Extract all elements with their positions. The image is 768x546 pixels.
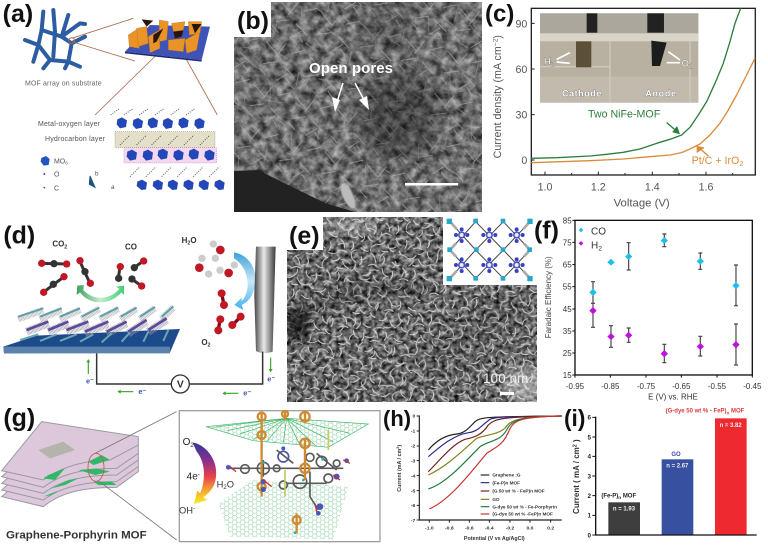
panel c: polarization chart xyxy=(485,1,755,210)
zoom circle on framework xyxy=(69,38,75,44)
label O2: O xyxy=(201,338,208,347)
y labels: -5 xyxy=(411,488,416,494)
bar labels: (G-dye 50 wt % - FeP) xyxy=(666,409,727,415)
caption: metal-oxygen layer: Metal-oxygen layer xyxy=(38,121,101,128)
legend: (G-dye 50 wt % -FeP)n MOF xyxy=(492,512,553,517)
panel label i: (i) xyxy=(564,405,585,431)
bar labels: MOF xyxy=(729,409,745,415)
connector lines from MOF to array xyxy=(72,18,217,115)
label OH-: OH xyxy=(179,505,193,515)
curve: Two NiFe-MOF xyxy=(531,8,741,158)
y axis labels: 45 xyxy=(563,305,572,314)
x labels: 0.2 xyxy=(547,525,554,531)
series H2 xyxy=(589,307,740,357)
circuit wiring xyxy=(97,352,263,384)
voltmeter: V xyxy=(177,380,184,391)
label Pt/C + IrO2: Pt/C + IrO xyxy=(692,155,739,167)
legend: CO xyxy=(591,227,606,238)
bar labels xyxy=(601,409,745,512)
y labels: -4 xyxy=(411,473,416,479)
caption: Graphene-Porphyrin MOF xyxy=(6,530,147,542)
y labels: 6 xyxy=(587,415,591,422)
legend MO6 O C: 6 xyxy=(65,161,68,166)
x axis labels: -0.85 xyxy=(601,382,620,391)
x labels: -1.0 xyxy=(425,525,434,531)
label H2O: O xyxy=(190,236,197,245)
inset photo electrolyzer: Cathode xyxy=(562,89,601,99)
panel i: bar chart xyxy=(564,405,757,539)
y axis labels: 55 xyxy=(563,283,572,292)
y title: ) xyxy=(572,439,581,444)
x title: Potential (V vs Ag/AgCl) xyxy=(464,536,525,542)
caption: hydrocarbon layer: Hydrocarbon layer xyxy=(45,136,106,143)
legend: H xyxy=(591,241,598,252)
bar labels: n = 3.82 xyxy=(720,423,742,429)
curve: Pt/C + IrO2 xyxy=(531,58,755,163)
zoom circle xyxy=(88,453,104,481)
x axis labels: -0.65 xyxy=(672,382,691,391)
x axis labels: 1.6 xyxy=(699,182,713,194)
panel e: SEM image with structure inset xyxy=(285,215,547,403)
inset photo electrolyzer: O xyxy=(682,59,689,69)
label CO2: 2 xyxy=(64,244,67,250)
x axis labels: -0.95 xyxy=(566,382,585,391)
panel label d: (d) xyxy=(3,221,35,249)
y labels: 4 xyxy=(587,454,591,461)
label H2O: O xyxy=(227,479,234,489)
bar labels: (Fe-P) xyxy=(601,493,618,499)
y axis labels: 25 xyxy=(563,349,572,358)
inset molecular model box xyxy=(179,411,380,542)
y axis labels: 60 xyxy=(515,64,527,76)
y labels xyxy=(411,414,416,524)
series CO xyxy=(589,237,740,296)
y labels: -1 xyxy=(411,429,416,435)
panel label b: (b) xyxy=(237,7,269,35)
x labels: -0.2 xyxy=(506,525,515,531)
inset photo electrolyzer: Anode xyxy=(645,89,676,99)
chart frame and axes xyxy=(531,8,755,175)
y labels: 1 xyxy=(587,513,591,520)
label H2O: H xyxy=(217,479,223,489)
x labels: 0.0 xyxy=(527,525,534,531)
x axis labels: -0.75 xyxy=(637,382,656,391)
y title: Current ( mA / cm xyxy=(572,447,581,514)
y labels: -6 xyxy=(411,503,416,509)
legend: (G 50 wt % - FeP)n MOF xyxy=(492,489,545,494)
x labels: -0.8 xyxy=(445,525,454,531)
label 4e-: - xyxy=(198,472,200,478)
icon: axes xyxy=(89,171,115,191)
legend: 2 xyxy=(598,246,602,253)
caption: MOF array on substrate: MOF array on substrate xyxy=(25,80,102,87)
label H2O: H xyxy=(182,236,187,245)
label CO: CO xyxy=(125,242,137,251)
panel g: graphene porphyrin MOF xyxy=(2,404,380,542)
voltmeter xyxy=(171,375,189,393)
legend: GO xyxy=(492,497,500,502)
panel label e: (e) xyxy=(289,222,320,250)
bar labels: MOF xyxy=(621,493,636,499)
y labels: -7 xyxy=(411,518,416,524)
y axis labels: 85 xyxy=(563,216,572,225)
y title: 2 xyxy=(572,444,578,447)
legend: Graphene :G xyxy=(492,473,521,478)
x axis labels: 1.2 xyxy=(591,182,606,194)
arrows to pores xyxy=(332,83,369,112)
x axis labels: 1.0 xyxy=(538,182,552,194)
x axis labels: 1.4 xyxy=(645,182,660,194)
inset: crystal structure xyxy=(447,219,533,281)
label Pt/C + IrO2: 2 xyxy=(739,159,743,168)
label O2: O xyxy=(183,437,190,448)
arrow orange xyxy=(697,147,708,156)
y axis title: Current density (mA cm xyxy=(492,46,504,158)
electron labels xyxy=(86,374,275,398)
x labels: -0.6 xyxy=(465,525,474,531)
y labels: 5 xyxy=(587,434,591,441)
x axis labels: -0.55 xyxy=(708,382,727,391)
arrow: water to oxygen xyxy=(234,252,256,310)
legend MO6 O C: O xyxy=(54,172,60,179)
icon: blue MOF framework xyxy=(25,10,85,68)
chart frame xyxy=(575,220,752,375)
molecules H2O and O2 xyxy=(195,240,245,334)
layered sheets xyxy=(2,422,138,507)
bar labels: n xyxy=(618,495,621,500)
tick marks xyxy=(572,220,752,378)
x labels: -0.4 xyxy=(485,525,494,531)
y axis title: −2 xyxy=(493,38,500,46)
legend xyxy=(579,227,606,253)
reaction arrow gradient xyxy=(193,443,216,504)
y axis labels xyxy=(563,216,572,380)
inset photo electrolyzer: 2 xyxy=(689,64,693,70)
icon: substrate with orange sheets xyxy=(125,19,210,62)
panel d: electrochemical cell schematic xyxy=(3,221,276,398)
legend xyxy=(481,473,557,517)
y axis labels: 65 xyxy=(563,261,572,270)
inset photo electrolyzer xyxy=(540,13,698,103)
panel label c: (c) xyxy=(485,1,514,28)
inset photo electrolyzer: H xyxy=(544,57,551,67)
x labels xyxy=(425,525,554,531)
y title: 2 xyxy=(396,447,400,449)
bar labels: n = 2.67 xyxy=(666,464,689,470)
crystal layers diagram xyxy=(111,109,225,190)
axes xyxy=(419,415,562,520)
label H2O: 2 xyxy=(223,485,227,491)
annotation: open pores: Open pores xyxy=(309,60,393,77)
y axis labels: 90 xyxy=(515,18,527,30)
bar labels: n = 1.93 xyxy=(613,506,636,512)
electron labels: e⁻ xyxy=(267,374,275,383)
top graphene sheet xyxy=(206,418,368,447)
label CO2: CO xyxy=(52,240,64,249)
electron arrows xyxy=(86,358,273,395)
x axis labels: -0.45 xyxy=(743,382,762,391)
panel label g: (g) xyxy=(3,404,35,432)
axes xyxy=(596,417,757,535)
y labels xyxy=(587,415,591,539)
scale bar xyxy=(500,392,514,395)
legend MO6 O C: C xyxy=(54,185,59,192)
y labels: 2 xyxy=(587,493,591,500)
orange linkers xyxy=(258,411,310,533)
legend MO6 O C: MO xyxy=(54,158,65,165)
label OH-: - xyxy=(193,506,195,512)
error bars xyxy=(591,234,738,365)
y title: Current (mA / cm xyxy=(397,449,403,492)
molecules CO2 and CO xyxy=(38,257,147,296)
label O2: 2 xyxy=(190,442,194,449)
label H2O: 2 xyxy=(187,241,190,247)
inset photo electrolyzer: 2 xyxy=(551,62,555,68)
panel label h: (h) xyxy=(383,406,411,431)
x axis title: Voltage (V) xyxy=(614,198,670,210)
panel h: LSV curves xyxy=(383,406,562,542)
panel a: MOF array schematic xyxy=(3,0,225,192)
scale label 100 nm: 100 nm xyxy=(483,371,528,386)
legend: G-dye 50 wt % - Fe-Porphyrin xyxy=(492,504,557,509)
icon: axes: b xyxy=(95,171,99,178)
panel f: Faradaic efficiency chart xyxy=(534,216,762,401)
x axis labels xyxy=(538,182,713,194)
y labels: 0 xyxy=(413,414,416,420)
y axis labels: 15 xyxy=(563,371,572,380)
panel label a: (a) xyxy=(3,0,33,28)
panel label f: (f) xyxy=(534,216,559,244)
electrode rod xyxy=(254,247,276,353)
y labels: -3 xyxy=(411,458,416,464)
x axis title: E (V) vs. RHE xyxy=(648,392,698,401)
scale bar xyxy=(405,183,458,186)
bottom graphene sheet xyxy=(218,480,348,539)
x axis labels xyxy=(566,382,762,391)
legend: (Fe-P)n MOF xyxy=(492,480,520,485)
y axis labels xyxy=(515,18,527,167)
arrow green xyxy=(667,123,679,133)
ticks xyxy=(417,416,551,523)
y axis labels: 75 xyxy=(563,238,572,247)
legend MO6 O C xyxy=(41,156,68,192)
icon: axes: a xyxy=(111,184,115,191)
MOF on substrate xyxy=(3,306,180,353)
y labels: 3 xyxy=(587,473,591,480)
electron labels: e⁻ xyxy=(243,389,251,398)
y labels: -2 xyxy=(411,444,416,450)
pale yellow linkers xyxy=(285,430,328,497)
electron labels: e⁻ xyxy=(138,387,146,396)
bar labels: GO xyxy=(671,452,681,458)
y title: ) xyxy=(397,445,403,447)
porphyrin molecules xyxy=(227,450,343,510)
panel b: SEM image of nanosheets xyxy=(234,2,482,212)
label 4e-: 4e xyxy=(187,471,198,482)
y axis title: Faradaic Efficiency (%) xyxy=(544,256,553,338)
y axis title: ) xyxy=(492,35,504,39)
callout lines xyxy=(95,412,177,540)
electron labels: e⁻ xyxy=(86,376,94,385)
bar labels: n xyxy=(727,410,730,415)
label Two NiFe-MOF: Two NiFe-MOF xyxy=(588,108,661,120)
LSV curves xyxy=(428,416,562,509)
y axis labels: 0 xyxy=(521,155,527,167)
y axis labels: 30 xyxy=(515,110,527,122)
arrow: CO2 to CO xyxy=(77,285,124,302)
ticks xyxy=(592,417,596,535)
y labels: 0 xyxy=(587,532,591,539)
label O2: 2 xyxy=(208,343,211,349)
y axis labels: 35 xyxy=(563,327,572,336)
ticks xyxy=(531,23,733,175)
bars xyxy=(608,418,747,535)
